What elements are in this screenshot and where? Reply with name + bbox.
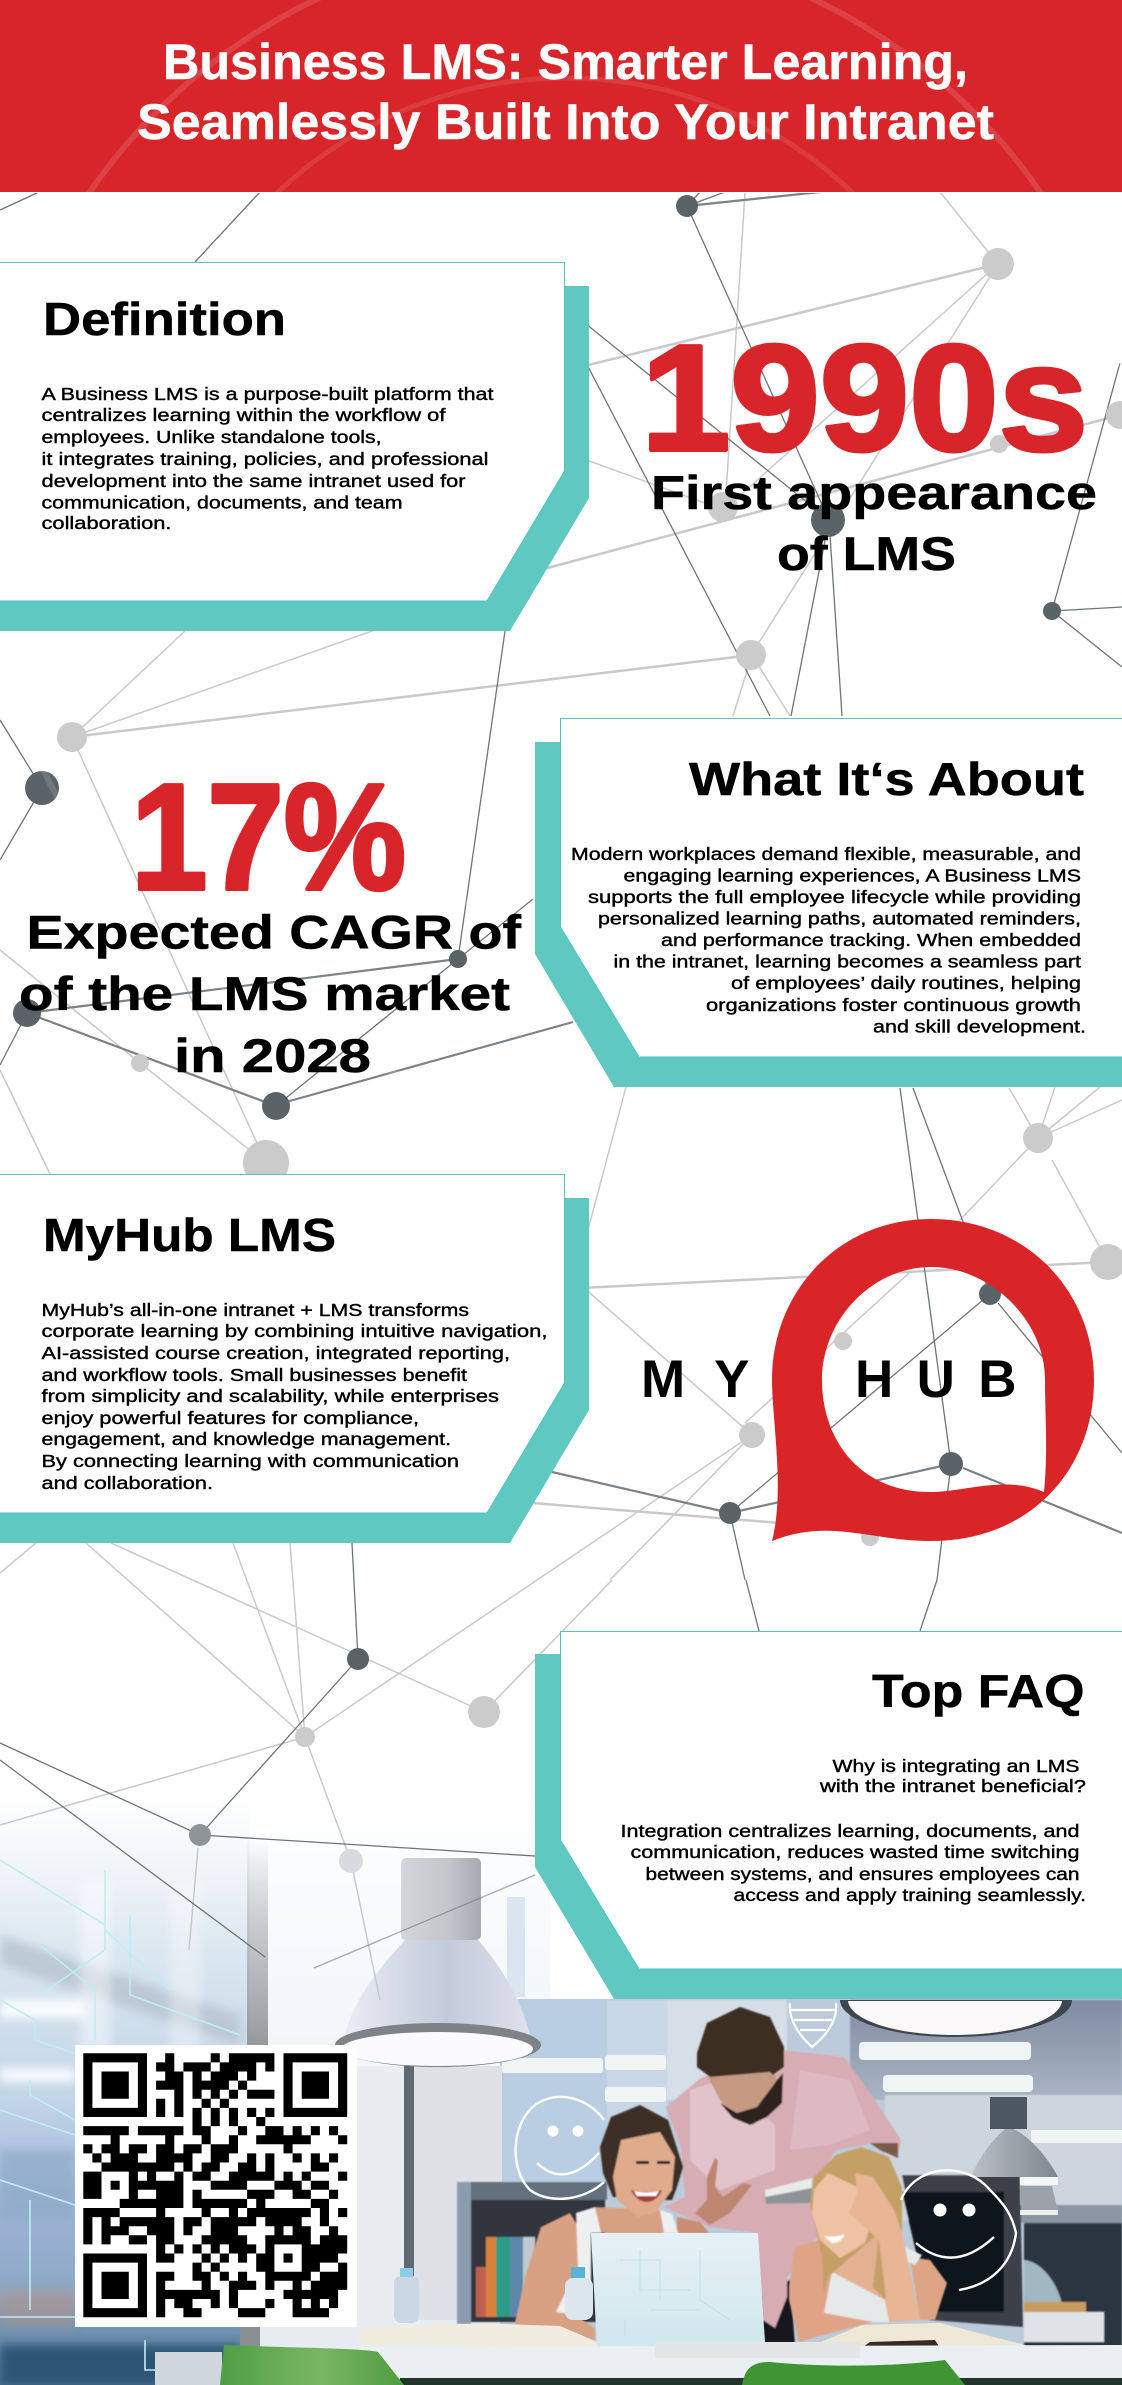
panel: top faq (535, 1632, 1122, 1999)
text block: myhub body: engagement, and knowledge management. (42, 1429, 451, 1449)
text block: definition body: A Business LMS is a purpose-built platform that (42, 384, 494, 404)
stat: 17% expected CAGR: in 2028 (174, 1029, 371, 1082)
stat: 1990s first appearance of LMS: First appearance (651, 466, 1097, 519)
panel: myhub lms (0, 1174, 589, 1543)
text block: definition body: centralizes learning within the workflow of (42, 405, 446, 425)
stat: 17% expected CAGR (19, 752, 521, 1082)
heading: what it's about: What It‘s About (689, 753, 1084, 805)
text block: definition body: collaboration. (42, 513, 172, 533)
text block: what it's about body: and performance tracking. When embedded (661, 930, 1081, 950)
text block: definition body: communication, documents, and team (42, 492, 402, 512)
text block: myhub body: MyHub’s all-in-one intranet + LMS transforms (42, 1300, 469, 1320)
text block: myhub body: and workflow tools. Small businesses benefit (42, 1365, 467, 1385)
text block: what it's about body: supports the full employee lifecycle while providing (588, 887, 1081, 907)
panel: what it's about (535, 718, 1122, 1087)
stat: 1990s first appearance of LMS: 1990s (641, 313, 1088, 482)
text block: what it's about body (571, 844, 1086, 1036)
text block: definition body: development into the same intranet used for (42, 471, 466, 491)
background: network of nodes and links (0, 192, 1122, 2000)
text block: what it's about body: personalized learning paths, automated reminders, (598, 908, 1081, 928)
bottle by the pillar (394, 2268, 419, 2323)
text block: myhub body: and collaboration. (42, 1473, 213, 1493)
background room (457, 2000, 1122, 2348)
text block: faq answer: Integration centralizes learning, documents, and (620, 1821, 1080, 1841)
title: Seamlessly Built Into Your Intranet (137, 94, 994, 150)
text block: definition body (42, 384, 494, 533)
text block: faq answer: communication, reduces wasted time switching (630, 1842, 1080, 1862)
text block: myhub body (42, 1300, 548, 1493)
top lamp (840, 2000, 1072, 2037)
heading: myhub lms: MyHub LMS (43, 1209, 336, 1261)
text block: myhub body: AI-assisted course creation, integrated reporting, (42, 1343, 510, 1363)
text block: what it's about body: of employees’ daily routines, helping (731, 973, 1081, 993)
ceiling lights (502, 2042, 1122, 2143)
text block: myhub body: from simplicity and scalability, while enterprises (42, 1386, 499, 1406)
bottle on table (565, 2267, 593, 2320)
text block: myhub body: corporate learning by combining intuitive navigation, (42, 1321, 548, 1341)
text block: what it's about body: in the intranet, learning becomes a seamless part (614, 952, 1081, 972)
text block: faq answer: between systems, and ensures employees can (646, 1864, 1080, 1884)
text block: myhub body: enjoy powerful features for compliance, (42, 1408, 419, 1428)
stat: 1990s first appearance of LMS: of LMS (777, 527, 956, 580)
logo: MyHub speech bubble: HUB (855, 1350, 1016, 1409)
title (137, 34, 994, 150)
panel: definition (0, 262, 589, 631)
header banner (0, 0, 1122, 1099)
heading: definition: Definition (43, 293, 286, 345)
text block: what it's about body: organizations foster continuous growth (706, 995, 1081, 1015)
logo: MyHub speech bubble: MY (641, 1350, 750, 1409)
text block: what it's about body: engaging learning experiences, A Business LMS (624, 866, 1081, 886)
right pendant lamp (971, 2097, 1058, 2215)
text block: faq question: with the intranet beneficial? (819, 1776, 1086, 1796)
man in pink shirt (664, 2007, 901, 2345)
title: Business LMS: Smarter Learning, (163, 34, 968, 90)
photo: office scene with three colleagues at a laptop (0, 1790, 1122, 2385)
text block: definition body: it integrates training, policies, and professional (42, 449, 488, 469)
icon: left chalk smiley (516, 2097, 604, 2199)
text block: what it's about body: Modern workplaces demand flexible, measurable, and (571, 844, 1081, 864)
open books and table (155, 2323, 1122, 2385)
text block: myhub body: By connecting learning with communication (42, 1451, 459, 1471)
stat: 1990s first appearance of LMS (641, 313, 1097, 580)
heading: top faq: Top FAQ (872, 1665, 1084, 1717)
icon: chalk bulb sketch (790, 2003, 836, 2047)
text block: definition body: employees. Unlike standalone tools, (42, 427, 382, 447)
stat: 17% expected CAGR: of the LMS market (19, 967, 510, 1020)
hanging lamp over table (335, 1858, 541, 2067)
green chairs (220, 2345, 965, 2385)
circuit lines (0, 1860, 240, 2370)
QR code (75, 2045, 357, 2327)
logo: MyHub speech bubble (641, 1219, 1094, 1541)
icon: right chalk smiley (901, 2170, 1016, 2290)
text block: faq question: Why is integrating an LMS (832, 1756, 1080, 1776)
left woman (515, 2105, 709, 2340)
text block: faq question (819, 1756, 1086, 1796)
text block: what it's about body: and skill development. (873, 1016, 1086, 1036)
right woman (789, 2147, 947, 2342)
text block: faq answer: access and apply training seamlessly. (734, 1885, 1086, 1905)
stat: 17% expected CAGR: 17% (131, 752, 406, 921)
stat: 17% expected CAGR: Expected CAGR of (26, 906, 521, 958)
text block: faq answer (620, 1821, 1086, 1905)
laptop (591, 2233, 765, 2348)
